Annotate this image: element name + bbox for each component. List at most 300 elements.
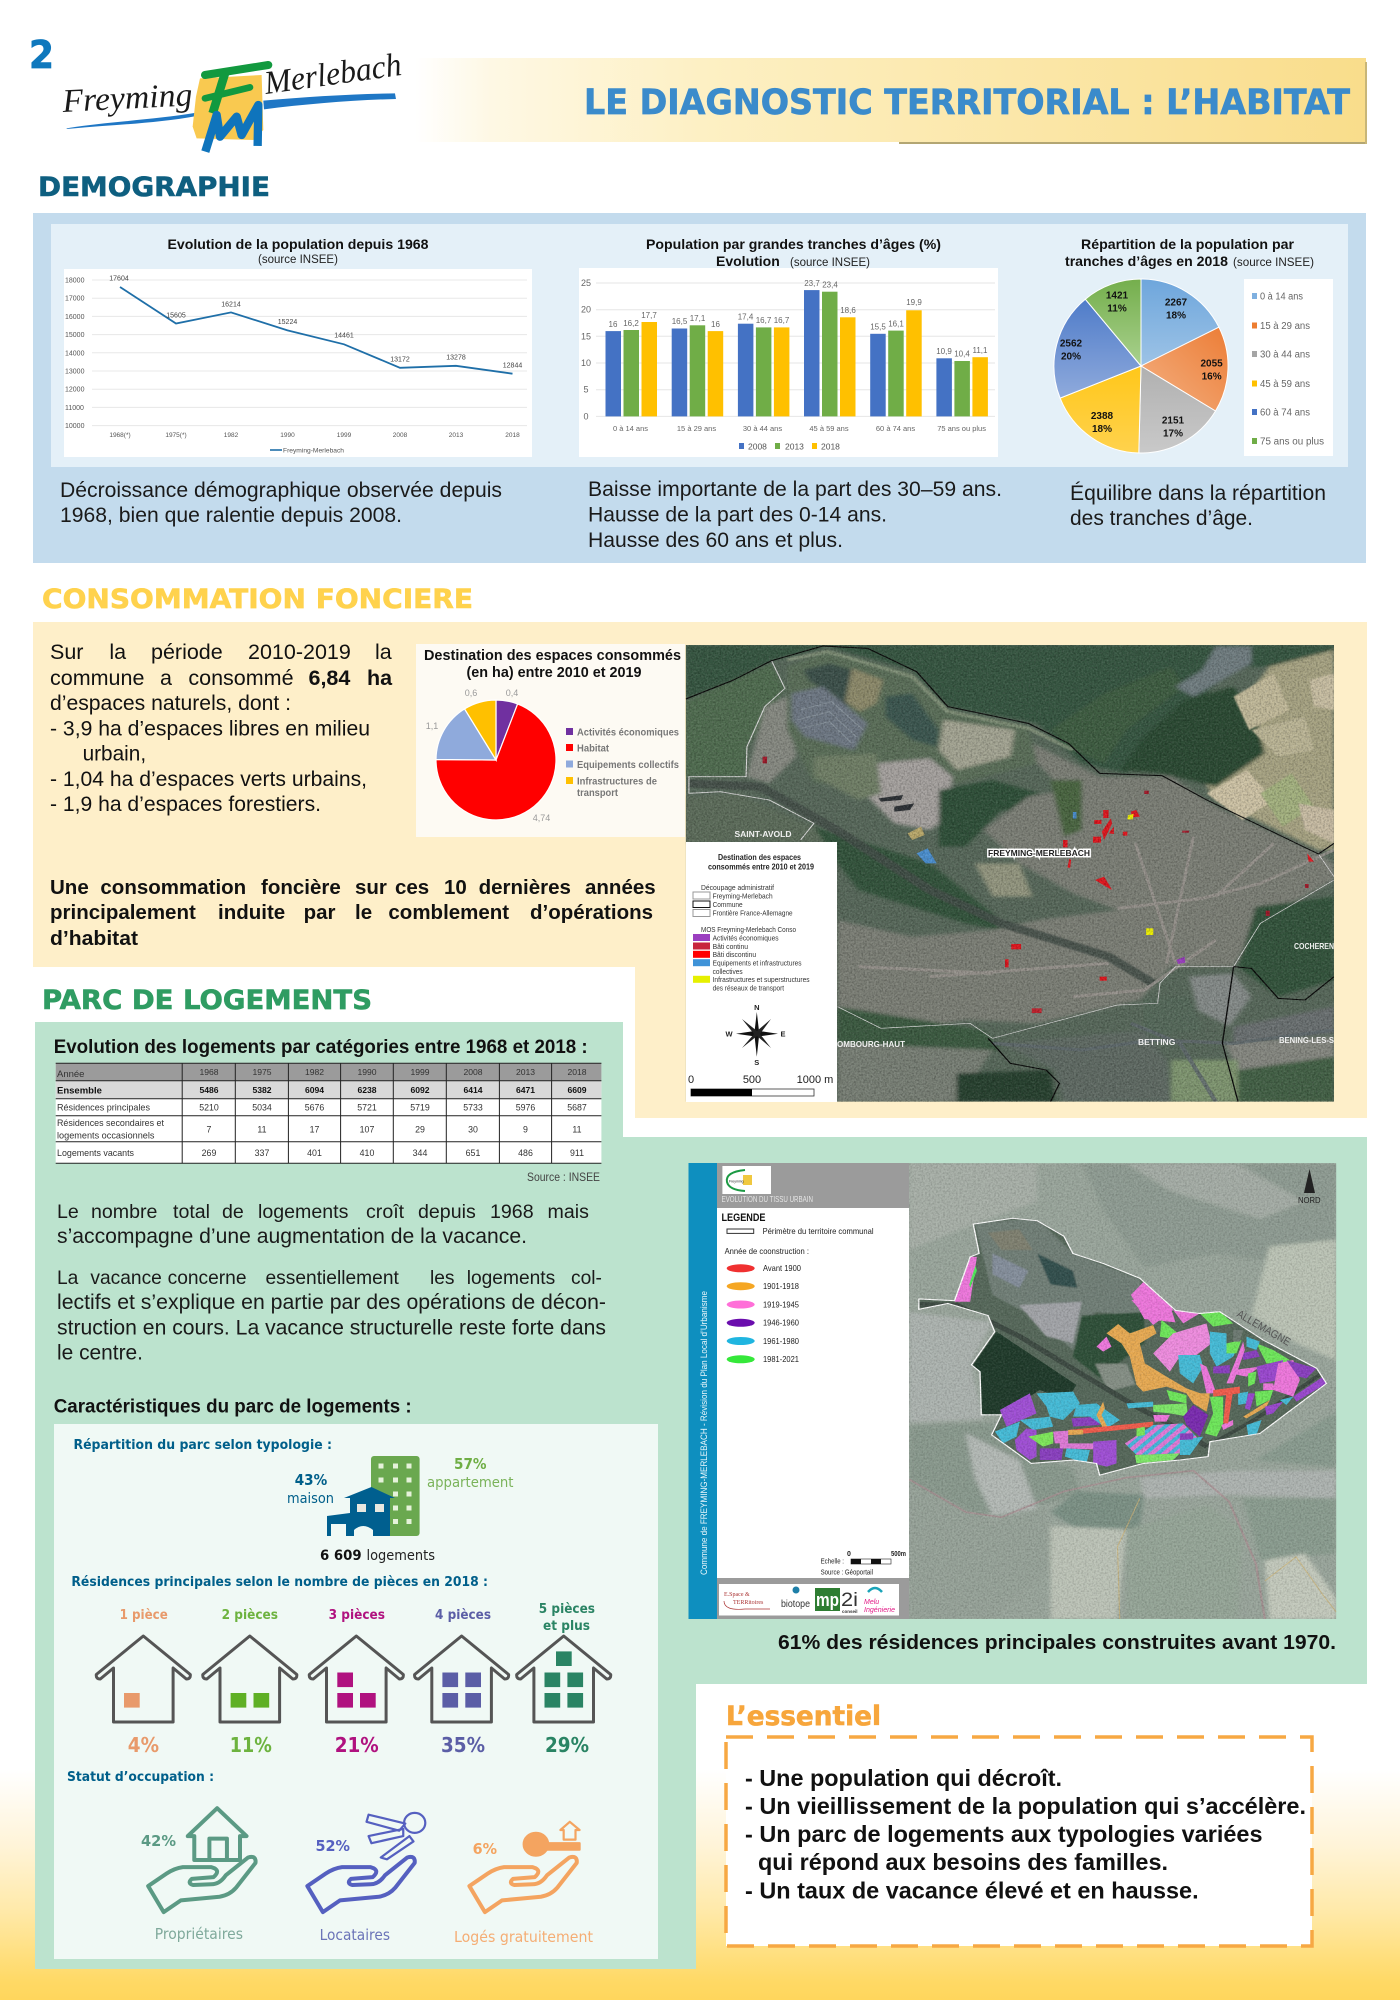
map side strip: Commune de FREYMING-MERLEBACH - Révision du Plan Local d’Urbanisme [699,1291,710,1575]
text: decroissance demographique: 1968, bien que ralentie depuis 2008. [60,503,402,527]
bar chart: tranches d'ages: 16,7 [774,316,790,325]
label: 57% appartement: appartement [427,1475,514,1491]
line chart: evolution de la population: 14461 [334,332,354,340]
bar chart: tranches d'ages: 25 [581,278,591,288]
pie chart: destination des espaces consommes: 1,1 [426,721,438,731]
map legend: annee de construction: 1901-1918 [763,1281,799,1291]
icon: locataires: Locataires [320,1926,390,1944]
table: logements par categories: 5382 [252,1085,272,1095]
label: 57% appartement: 57% [454,1455,486,1473]
icon: north arrow [1298,1169,1321,1205]
text: periode 2010-2019: consommé [188,666,294,690]
icon: compass rose: E [780,1030,786,1038]
pie chart: repartition par age 2018: 2151 [1162,416,1185,426]
bar chart: tranches d'ages: 75 ans ou plus [937,424,986,433]
text: la vacance: le centre. [57,1341,143,1364]
text: la vacance: struction en cours. La vacance structurelle reste forte dans [57,1316,606,1339]
bar chart: tranches d'ages: 2013 [785,442,804,452]
map header: EVOLUTION DU TISSU URBAIN [722,1195,813,1204]
table: logements par categories: 5719 [410,1102,430,1112]
pie chart: repartition par age 2018: 18% [1166,310,1186,322]
map partner logos [717,1578,909,1619]
line chart: evolution de la population: 12000 [65,387,85,394]
line chart: evolution de la population: 13172 [390,356,410,364]
bar chart: tranches d'ages: (source INSEE) [790,257,870,269]
map: evolution du tissu urbain [909,1163,1336,1619]
table: logements par categories: logements occasionnels [57,1131,155,1142]
icon: proprietaires [141,1808,256,1943]
icon: compass rose [725,1003,786,1067]
line chart: evolution de la population: 1990 [280,432,295,439]
text: periode 2010-2019: d’espaces naturels, dont : [50,691,291,715]
item: 5 pieces et plus: 5 pièces [539,1602,595,1617]
table: logements par categories: 5976 [516,1102,535,1112]
text: nombre total de logements: logements [258,1201,349,1223]
item: 2 pieces: 11% [230,1733,272,1757]
map legend: annee de construction: 500m [891,1551,906,1558]
line chart: evolution de la population: 13000 [65,368,85,376]
map legend: annee de construction: 1919-1945 [763,1299,799,1309]
bar chart: tranches d'ages: Evolution [716,253,780,269]
text: nombre total de logements: total [173,1201,210,1223]
table: logements par categories: 1982 [305,1067,324,1077]
map legend: destination des espaces: 500 [743,1074,761,1086]
table: logements par categories: 6094 [305,1085,324,1095]
text: la vacance: col- [571,1268,602,1289]
text: conclusion consommation fonciere: induite [218,901,285,924]
text: la vacance: essentiellement [266,1268,399,1289]
line chart: evolution de la population: 15224 [278,319,297,326]
table: logements par categories: 29 [415,1124,425,1134]
bar chart: tranches d'ages: 16,2 [623,319,639,328]
bar chart: tranches d'ages: 30 à 44 ans [743,424,782,433]
table source: Source : INSEE [527,1172,600,1184]
map legend: annee de construction: 1946-1960 [763,1318,799,1328]
text: decroissance demographique [60,478,502,527]
table: logements par categories: 6092 [410,1085,430,1095]
map: destination des espaces consommes: FREYMING-MERLEBACH [988,848,1090,858]
table: logements par categories: 17 [310,1124,319,1134]
map legend: annee de construction: Source : Géoportail [821,1570,873,1576]
bar chart: tranches d'ages: 16 [609,320,618,329]
bar chart: tranches d'ages: 60 à 74 ans [876,424,915,433]
map legend: annee de construction: Année de coonstruction : [725,1246,809,1256]
text: conclusion consommation fonciere: dernières [479,876,571,899]
text: periode 2010-2019: - 1,9 ha d’espaces forestiers. [50,792,321,816]
text: nombre total de logements: de [222,1201,244,1223]
pie chart: repartition par age 2018: 16% [1202,372,1222,382]
text: decroissance demographique: Décroissance démographique observée depuis [60,478,502,502]
bar chart: tranches d'ages: Population par grandes tranches d’âges (%) [646,236,941,252]
pie chart: repartition par age 2018: 1421 [1106,290,1129,302]
line chart: evolution de la population: 17000 [65,296,85,303]
item: 1 piece [96,1608,190,1757]
table: logements par categories: 5486 [199,1085,219,1095]
bar chart: tranches d'ages: 15 à 29 ans [677,424,716,433]
map legend: destination des espaces: des réseaux de transport [713,983,785,992]
panel: caracteristiques du parc [54,1424,658,1959]
map legend: destination des espaces: Freyming-Merlebach [713,892,773,900]
line chart: evolution de la population: (source INSEE) [258,254,338,266]
item: 5 pieces et plus [517,1602,611,1757]
pie chart: destination des espaces consommes: Activités économiques [577,726,679,738]
heading: residences principales: Résidences principales selon le nombre de pièces en 2018 : [71,1575,488,1590]
line chart: evolution de la population: 1999 [337,432,352,439]
panel: l'essentiel: - Un taux de vacance élevé et en hausse. [745,1878,1199,1904]
pie chart: repartition par age 2018: tranches d’âges en 2018 [1065,253,1228,269]
map: destination des espaces consommes: SAINT-AVOLD [735,829,791,839]
table: logements par categories: 6238 [357,1085,377,1095]
table: logements par categories: 6471 [516,1085,535,1095]
table: logements par categories: 6414 [463,1085,483,1095]
bar chart: tranches d'ages: 17,7 [641,311,657,320]
bar chart: tranches d'ages [579,236,998,457]
pie chart: destination des espaces consommes: Destination des espaces consommés [424,648,681,664]
map legend: annee de construction: 1981-2021 [763,1354,799,1364]
pie chart: repartition par age 2018: 75 ans ou plus [1260,436,1324,448]
table: logements par categories: 344 [413,1148,427,1158]
text: la vacance: vacance [90,1268,162,1289]
text: nombre total de logements: depuis [418,1201,476,1223]
text: periode 2010-2019 [50,640,393,816]
pie chart: repartition par age 2018: 0 à 14 ans [1260,292,1303,302]
bar chart: tranches d'ages: 5 [583,385,589,395]
pie chart: destination des espaces consommes [416,644,685,837]
line chart: evolution de la population: Freyming-Merlebach [283,448,344,454]
map partner logos: Melu [864,1599,879,1606]
line chart: evolution de la population: 16000 [65,314,85,321]
heading: parc de logements: PARC DE LOGEMENTS [42,985,372,1016]
table: logements par categories: Année [57,1069,84,1080]
pie chart: repartition par age 2018: 15 à 29 ans [1260,321,1310,332]
table: logements par categories: 410 [360,1148,374,1158]
bar chart: tranches d'ages: 23,4 [822,280,838,290]
bar chart: tranches d'ages: 20 [581,305,591,315]
item: 3 pieces: 21% [335,1733,379,1757]
item: 5 pieces et plus: et plus [543,1619,590,1634]
item: 4 pieces: 35% [441,1733,485,1757]
pie chart: repartition par age 2018: 18% [1092,424,1112,435]
table: logements par categories: 401 [307,1148,322,1158]
text: equilibre [1070,480,1326,530]
icon: locataires [307,1813,425,1944]
text: baisse importante: Hausse des 60 ans et plus. [588,528,843,552]
map header: Freyming [729,1180,744,1184]
panel: parc de logements: ALLEMAGNE [1234,1308,1292,1349]
text: periode 2010-2019: urbain, [83,742,146,766]
logo: Freyming-Merlebach [61,47,404,152]
label: 43% maison: 43% [295,1471,327,1489]
panel: parc de logements [35,1022,1367,1969]
pie chart: repartition par age 2018 [1054,236,1333,456]
map legend: annee de construction: Avant 1900 [763,1263,801,1273]
map legend: annee de construction: 0 [847,1551,851,1558]
heading: consommation fonciere: CONSOMMATION FONCIERE [42,584,473,615]
item: 4 pieces [415,1608,509,1757]
map partner logos: mp [816,1590,839,1610]
text: periode 2010-2019: la [375,640,392,664]
text: residences construites avant 1970: 61% des résidences principales construites avant 1970. [778,1631,1336,1654]
table: logements par categories [56,1063,601,1163]
pie chart: destination des espaces consommes: Infrastructures de [577,776,657,788]
pie chart: repartition par age 2018: (source INSEE) [1233,257,1314,269]
bar chart: tranches d'ages: 23,7 [804,279,820,288]
bar chart: tranches d'ages: 16,1 [888,320,904,328]
panel: l'essentiel: qui répond aux besoins des familles. [758,1849,1168,1875]
panel: l'essentiel [726,1737,1312,1946]
text: la vacance: logements [467,1268,555,1289]
table: logements par categories: Résidences principales [57,1103,150,1114]
line chart: evolution de la population: 1982 [224,432,239,439]
text: periode 2010-2019: Sur [50,640,83,664]
bar chart: tranches d'ages: 16 [711,320,720,329]
line chart: evolution de la population: 2013 [449,432,464,439]
pie chart: repartition par age 2018: 17% [1163,428,1183,440]
icon: locataires: 52% [316,1837,350,1855]
text: conclusion consommation fonciere: par [304,901,336,924]
text: conclusion consommation fonciere: d’habitat [50,927,138,950]
map header [717,1163,909,1208]
icon: proprietaires: Propriétaires [155,1925,243,1943]
map side strip [688,1163,717,1619]
map: destination des espaces consommes: OMBOURG-HAUT [837,1039,906,1049]
text: evolution des logements heading: Evolution des logements par catégories entre 1968 et 2018 : [54,1037,588,1058]
icon: north arrow: NORD [1298,1195,1321,1205]
line chart: evolution de la population: 16214 [221,302,241,308]
label: 6 609 logements: 6 609 [320,1548,362,1564]
table: logements par categories: 30 [468,1124,478,1134]
text: conclusion consommation fonciere: ces [395,876,429,899]
line chart: evolution de la population: 12844 [503,362,522,370]
text: caracteristiques heading: Caractéristiques du parc de logements : [54,1397,412,1418]
table: logements par categories: 911 [570,1148,584,1158]
map partner logos: Ingénierie [864,1607,895,1614]
text: conclusion consommation fonciere: le [355,901,372,924]
line chart: evolution de la population: Evolution de la population depuis 1968 [168,236,429,252]
bar chart: tranches d'ages: 45 à 59 ans [809,424,849,433]
logo: Freyming-Merlebach: Merlebach [261,47,404,102]
table: logements par categories: 2018 [567,1067,587,1077]
title banner: LE DIAGNOSTIC TERRITORIAL : L’HABITAT [584,83,1350,123]
line chart: evolution de la population: 13278 [446,354,466,362]
text: conclusion consommation fonciere: foncière [261,876,341,899]
pie chart: repartition par age 2018: 20% [1061,352,1081,362]
icon: loges gratuitement: Logés gratuitement [454,1928,593,1946]
map legend: destination des espaces: Destination des espaces [718,853,801,862]
table: logements par categories: 1999 [410,1067,430,1077]
map partner logos: conseil [842,1609,858,1614]
text: conclusion consommation fonciere [50,876,656,950]
bar chart: tranches d'ages: 10,4 [954,350,970,358]
map legend: destination des espaces: Commune [713,900,743,909]
text: la vacance: concerne [168,1268,247,1289]
item: 5 pieces et plus: 29% [545,1733,589,1757]
map: destination des espaces consommes: BENING-LES-S [1279,1035,1334,1045]
text: conclusion consommation fonciere: Une [50,876,89,899]
table: logements par categories: 2008 [463,1067,483,1077]
label: 6 609 logements [320,1548,435,1564]
map: destination des espaces consommes: COCHEREN [1294,941,1334,951]
bar chart: tranches d'ages: 16,7 [756,316,772,325]
line chart: evolution de la population: 1975(*) [165,432,187,439]
bar chart: tranches d'ages: 0 [583,411,589,421]
line chart: evolution de la population: 2008 [393,432,408,439]
bar chart: tranches d'ages: 10 [581,358,591,368]
text: equilibre: Équilibre dans la répartition [1070,480,1326,505]
line chart: evolution de la population [64,236,532,457]
text: la vacance: lectifs et s’explique en partie par des opérations de décon- [57,1291,606,1314]
map: destination des espaces consommes: BETTING [1138,1037,1176,1047]
text: conclusion consommation fonciere: années [585,876,656,899]
text: nombre total de logements: 1968 [490,1201,534,1223]
pie chart: repartition par age 2018: 60 à 74 ans [1260,408,1310,418]
map partner logos: 2i [841,1590,858,1611]
heading: repartition typologie: Répartition du parc selon typologie : [74,1438,332,1453]
table: logements par categories: 11 [257,1124,267,1134]
table: logements par categories: 269 [202,1148,216,1158]
text: conclusion consommation fonciere: d’opérations [530,901,653,924]
text: la vacance [57,1268,606,1364]
bar chart: tranches d'ages: 16,5 [672,317,688,326]
panel: l'essentiel: - Un vieillissement de la population qui s’accélère. [745,1793,1306,1819]
text: conclusion consommation fonciere: comblement [388,901,509,924]
text: nombre total de logements [57,1201,589,1248]
text: periode 2010-2019: 2010-2019 [248,640,351,664]
line chart: evolution de la population: 14000 [65,350,85,357]
line chart: evolution de la population: 2018 [505,432,520,439]
map legend: destination des espaces: 0 [688,1074,694,1086]
bar chart: tranches d'ages: 17,1 [690,314,706,323]
text: la vacance: les [430,1268,455,1289]
text: conclusion consommation fonciere: 10 [444,876,467,899]
text: conclusion consommation fonciere: principalement [50,901,196,924]
text: periode 2010-2019: période [151,640,223,664]
heading: l'essentiel: L’essentiel [726,1701,881,1732]
bar chart: tranches d'ages: 17,4 [738,312,754,322]
pie chart: destination des espaces consommes: (en ha) entre 2010 et 2019 [466,665,642,681]
map legend: destination des espaces: Bâti discontinu [713,950,756,959]
line chart: evolution de la population: 18000 [65,278,85,284]
table: logements par categories: 1975 [252,1067,272,1077]
text: periode 2010-2019: a [160,666,172,690]
map legend: destination des espaces: collectives [713,967,743,976]
pie chart: destination des espaces consommes: 0,6 [465,688,477,698]
table: logements par categories: 7 [207,1124,212,1134]
pie chart: repartition par age 2018: Répartition de la population par [1081,236,1295,252]
label: 57% appartement [427,1455,514,1491]
text: nombre total de logements: Le [57,1201,79,1223]
item: 3 pieces [309,1608,403,1757]
panel: l'essentiel: - Un parc de logements aux typologies variées [745,1821,1262,1847]
bar chart: tranches d'ages: 11,1 [973,346,988,355]
table: logements par categories: 486 [518,1148,533,1158]
item: 1 piece: 1 pièce [120,1608,168,1623]
map legend: annee de construction: Echelle : [821,1558,844,1566]
text: la vacance: La [57,1268,79,1289]
table: logements par categories: 337 [255,1148,269,1158]
line chart: evolution de la population: 15000 [65,332,85,339]
text: baisse importante: Hausse de la part des 0-14 ans. [588,502,887,526]
text: conclusion consommation fonciere: sur [355,876,387,899]
icon: compass rose: S [754,1058,759,1067]
bar chart: tranches d'ages: 2008 [748,442,767,452]
table: logements par categories: 5210 [199,1102,219,1112]
bar chart: tranches d'ages: 2018 [821,442,840,452]
table: logements par categories: Résidences secondaires et [57,1118,164,1129]
map legend: annee de construction: Périmètre du territoire communal [763,1226,874,1236]
map: destination des espaces consommes [686,645,1334,1102]
pie chart: destination des espaces consommes: transport [577,787,618,799]
map legend: annee de construction [717,1208,909,1578]
title banner [415,58,1367,144]
table: logements par categories: 5676 [305,1102,324,1112]
pie chart: repartition par age 2018: 11% [1107,304,1127,314]
text: periode 2010-2019: commune [50,666,144,690]
pie chart: repartition par age 2018: 2388 [1091,411,1114,422]
text: periode 2010-2019: 6,84 [308,666,350,690]
icon: loges gratuitement: 6% [473,1840,497,1858]
text: baisse importante [588,477,1002,552]
heading: demographie: DEMOGRAPHIE [38,172,270,203]
table: logements par categories: 5034 [252,1102,272,1112]
bar chart: tranches d'ages: 18,6 [840,306,856,315]
panel: consommation fonciere [33,622,1367,1118]
bar chart: tranches d'ages: 15 [581,331,591,341]
map legend: destination des espaces: 1000 m [797,1074,833,1086]
pie chart: repartition par age 2018: 45 à 59 ans [1260,379,1310,390]
pie chart: destination des espaces consommes: 0,4 [506,688,518,698]
map legend: destination des espaces [686,842,837,1102]
text: baisse importante: Baisse importante de la part des 30–59 ans. [588,477,1002,501]
pie chart: destination des espaces consommes: 4,74 [533,813,550,823]
map legend: destination des espaces: Equipements et infrastructures [713,958,802,968]
table: logements par categories: Logements vacants [57,1148,134,1159]
item: 4 pieces: 4 pièces [435,1608,491,1623]
table: logements par categories: 9 [523,1124,528,1134]
table: logements par categories: Ensemble [57,1086,102,1096]
map legend: destination des espaces: MOS Freyming-Merlebach Conso [701,925,796,934]
text: nombre total de logements: s’accompagne d’une augmentation de la vacance. [57,1225,527,1248]
table: logements par categories: 5721 [357,1102,377,1112]
panel: l'essentiel: - Une population qui décroît. [745,1765,1062,1791]
panel: demographie [33,213,1366,563]
table: logements par categories: 5687 [567,1102,587,1112]
map legend: destination des espaces: consommés entre 2010 et 2019 [708,862,814,872]
bar chart: tranches d'ages: 19,9 [906,298,922,307]
map legend: annee de construction: LEGENDE [722,1212,766,1224]
table: logements par categories: 1968 [199,1067,219,1077]
page number: 2 [29,33,54,77]
text: periode 2010-2019: - 1,04 ha d’espaces verts urbains, [50,767,367,791]
item: 3 pieces: 3 pièces [329,1608,385,1623]
table: logements par categories: 107 [360,1124,374,1134]
text: periode 2010-2019: ha [367,666,393,690]
map partner logos: E.Space & [724,1592,750,1598]
pie chart: destination des espaces consommes: Equipements collectifs [577,759,679,771]
text: conclusion consommation fonciere: consommation [100,876,246,899]
label: 43% maison: maison [287,1491,334,1507]
map partner logos: TERRitoires [733,1600,764,1606]
text: nombre total de logements: croît [366,1201,405,1223]
map legend: annee de construction: 1961-1980 [763,1336,799,1346]
heading: statut d'occupation: Statut d’occupation : [67,1770,214,1785]
item: 1 piece: 4% [128,1733,159,1757]
line chart: evolution de la population: 15605 [166,312,186,320]
label: 6 609 logements: logements [366,1548,435,1564]
map legend: destination des espaces: Découpage administratif [701,883,775,892]
bar chart: tranches d'ages: 0 à 14 ans [613,424,648,433]
text: nombre total de logements: mais [548,1201,589,1223]
